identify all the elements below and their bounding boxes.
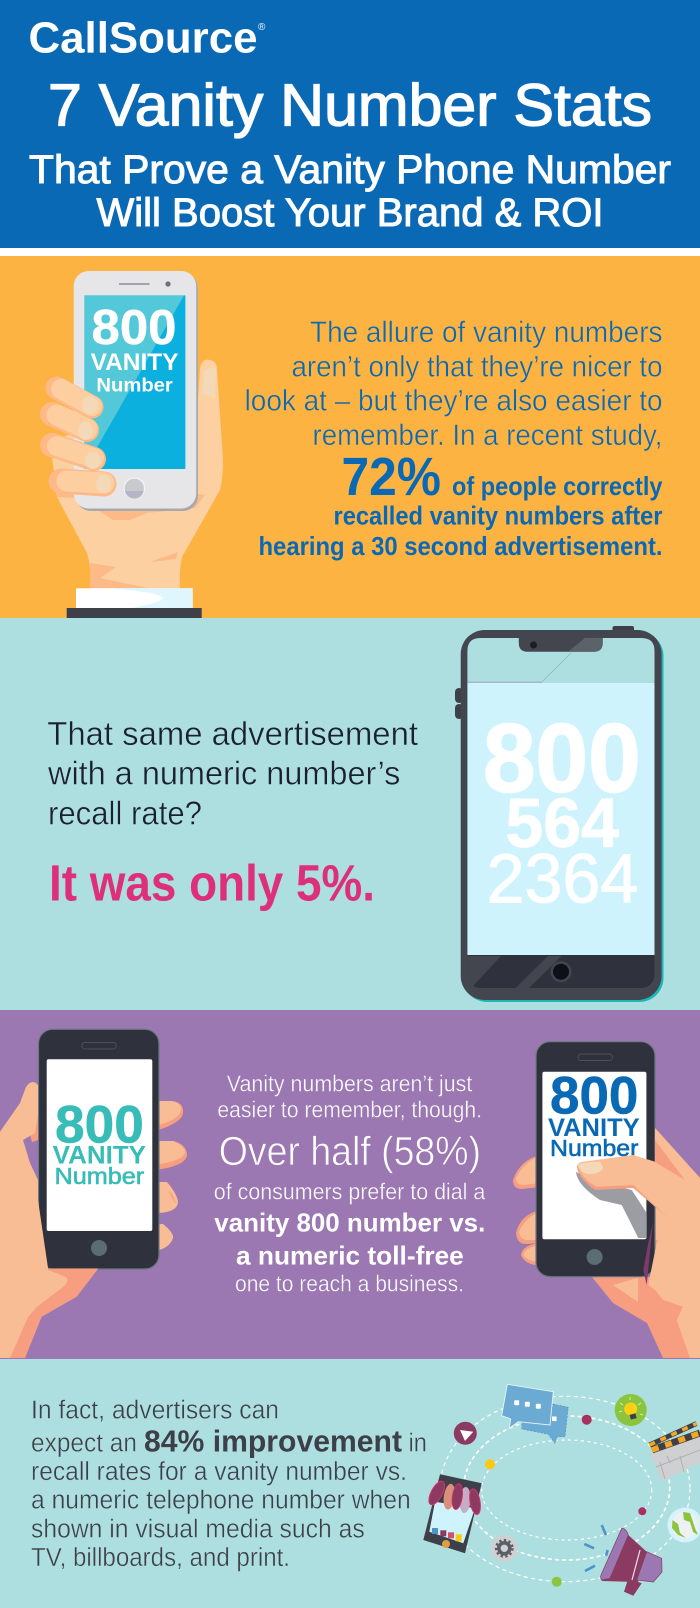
left fingers <box>155 1101 187 1251</box>
icon: play button <box>454 1422 477 1445</box>
subtitle <box>29 148 671 235</box>
panel: visual media recall <box>0 1359 700 1608</box>
logo: CallSource: CallSource <box>28 14 258 62</box>
dashed rings <box>440 1396 690 1582</box>
text: 84 percent improvement <box>31 1396 427 1572</box>
text: allure of vanity numbers: The allure of vanity numbers <box>310 316 662 349</box>
callout: 72 percent recall: hearing a 30 second advertisement. <box>258 531 662 561</box>
dots <box>485 1415 646 1587</box>
subtitle: That Prove a Vanity Phone Number <box>29 148 671 192</box>
icon: globe <box>668 1508 700 1542</box>
panel: consumer preference <box>0 1010 700 1359</box>
phone text <box>91 301 179 396</box>
icon: chat bubbles <box>502 1384 568 1443</box>
icon: megaphone <box>584 1525 662 1596</box>
phone text: 800 <box>92 301 176 355</box>
screen number <box>483 704 641 918</box>
right hand lower palm <box>592 1230 700 1358</box>
right phone text <box>548 1066 640 1161</box>
palm shading <box>57 480 205 588</box>
left phone text: VANITY <box>53 1141 146 1169</box>
left phone text <box>53 1096 146 1189</box>
thumb and hand <box>577 1128 700 1358</box>
text: allure of vanity numbers <box>245 316 663 452</box>
panel: memorability stat <box>0 256 700 618</box>
icon: gear <box>491 1535 518 1562</box>
callout: only 5 percent: It was only 5%. <box>49 855 375 912</box>
hand palm and thumb <box>50 360 223 590</box>
cuff <box>67 588 202 618</box>
screen number: 2364 <box>487 840 638 918</box>
text: 84 percent improvement: in <box>408 1430 427 1458</box>
panel: numeric recall <box>0 618 700 1010</box>
callout: 72 percent recall <box>258 447 663 561</box>
text: allure of vanity numbers: remember. In a recent study, <box>312 419 662 452</box>
text: vanity preference: Vanity numbers aren’t just <box>227 1071 473 1097</box>
text: vanity preference <box>214 1071 486 1296</box>
text: same advertisement question: with a numeric number’s <box>47 755 400 792</box>
text: 84 percent improvement: In fact, advertisers can <box>31 1396 279 1424</box>
text: allure of vanity numbers: look at – but they’re also easier to <box>245 384 663 417</box>
callout: 72 percent recall: recalled vanity numbers after <box>334 501 662 531</box>
icon: storefront tablet <box>423 1474 482 1553</box>
screen number: 800 <box>483 704 641 813</box>
text: 84 percent improvement: recall rates for a vanity number vs. <box>31 1458 407 1486</box>
fingers <box>52 388 111 493</box>
right phone text: 800 <box>550 1066 638 1125</box>
icon: light bulb <box>615 1394 647 1426</box>
text: vanity preference: of consumers prefer to dial a <box>214 1178 486 1204</box>
text: 84 percent improvement: TV, billboards, and print. <box>31 1544 290 1572</box>
callout: 72 percent recall: of people correctly <box>452 471 663 501</box>
text: same advertisement question: recall rate? <box>48 794 202 831</box>
illustration: marketing channels ring <box>423 1384 700 1596</box>
text: vanity preference: vanity 800 number vs. <box>214 1208 485 1238</box>
panel: header <box>0 0 700 248</box>
illustration: smartphone with numeric number <box>455 626 664 1002</box>
phone text: Number <box>96 374 173 396</box>
illustration: hand holding phone <box>50 271 223 618</box>
right phone text: VANITY <box>548 1114 640 1142</box>
text: same advertisement question: That same advertisement <box>47 715 418 752</box>
illustration: left hand holding phone <box>0 1029 187 1358</box>
text: 84 percent improvement: expect an <box>31 1430 137 1458</box>
phone <box>74 271 198 511</box>
right phone <box>536 1042 655 1277</box>
text: vanity preference: easier to remember, though. <box>217 1096 482 1122</box>
text: 84 percent improvement: 84% improvement <box>144 1424 402 1459</box>
left phone text: Number <box>54 1163 145 1189</box>
illustration: right hand dialing phone <box>513 1042 700 1358</box>
text: vanity preference: one to reach a business. <box>235 1270 464 1296</box>
text: 84 percent improvement: a numeric telephone number when <box>31 1486 411 1514</box>
left phone <box>38 1029 159 1269</box>
text: 84 percent improvement: shown in visual media such as <box>31 1515 365 1543</box>
title: 7 Vanity Number Stats <box>48 72 652 138</box>
text: same advertisement question <box>47 715 418 831</box>
right hand back fingers <box>513 1155 540 1266</box>
text: vanity preference: Over half (58%) <box>219 1128 481 1174</box>
thumb shadow on screen <box>576 1172 647 1238</box>
maroon crease <box>643 1222 653 1285</box>
subtitle: Will Boost Your Brand & ROI <box>96 191 604 235</box>
text: vanity preference: a numeric toll-free <box>236 1240 464 1270</box>
thumb nail <box>202 368 216 398</box>
logo: CallSource: ® <box>258 22 266 33</box>
left hand <box>0 1082 98 1358</box>
screen number: 564 <box>505 784 619 862</box>
icon: clapperboard <box>650 1424 700 1481</box>
callout: 72 percent recall: 72% <box>342 447 441 507</box>
right phone text: Number <box>550 1135 639 1161</box>
text: allure of vanity numbers: aren’t only that they’re nicer to <box>292 350 662 383</box>
left phone text: 800 <box>55 1096 144 1155</box>
phone text: VANITY <box>91 349 179 376</box>
